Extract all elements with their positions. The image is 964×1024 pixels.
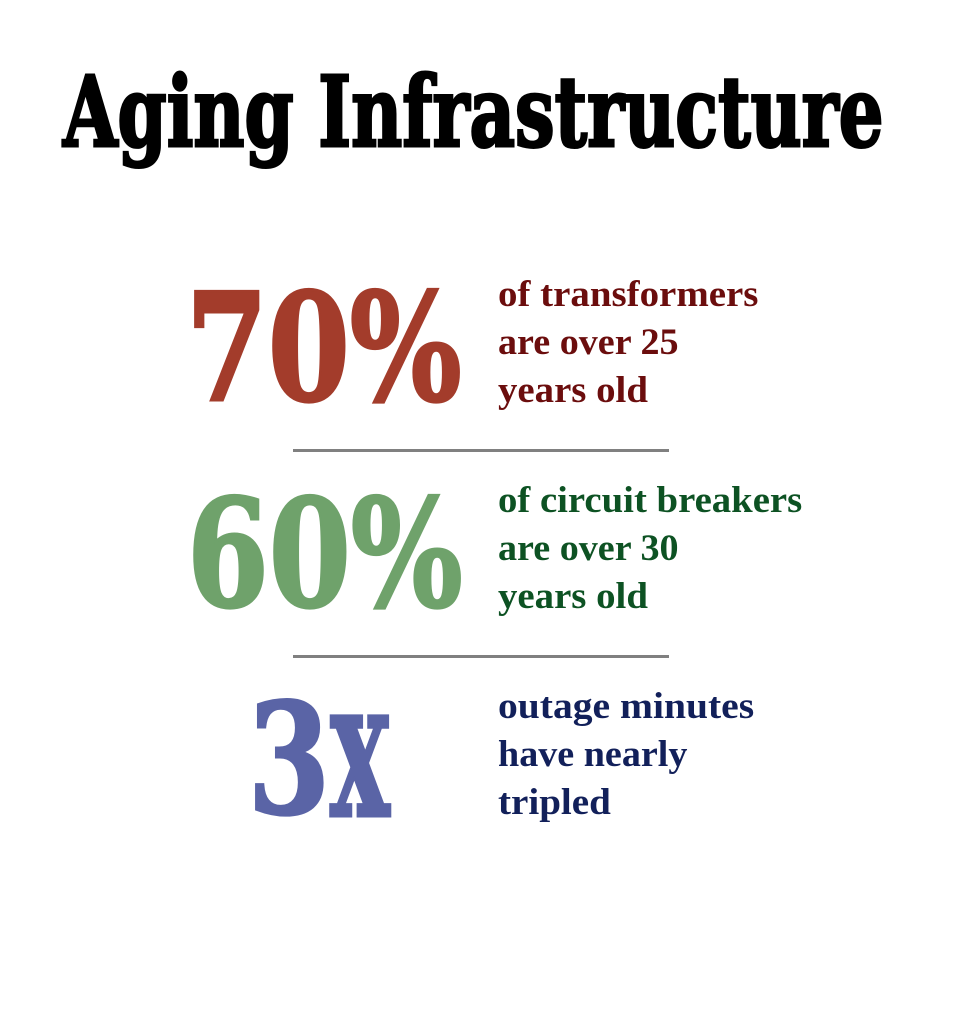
description: transformers: years old (498, 370, 648, 411)
description: outage minutes: tripled (498, 782, 611, 823)
description: circuit breakers: are over 30 (498, 528, 679, 569)
title: Aging Infrastructure (62, 54, 883, 169)
big number: 70%: 70% (186, 260, 462, 436)
big number: 60%: 60% (187, 466, 463, 642)
big number: 3x: 3 (248, 671, 330, 850)
description: transformers (498, 274, 758, 411)
description: circuit breakers: years old (498, 576, 648, 617)
panel: transformers stat (186, 260, 758, 436)
description: circuit breakers: of circuit breakers (498, 480, 802, 521)
divider line (293, 655, 669, 658)
description: transformers: are over 25 (498, 322, 679, 363)
big number: 3x (248, 637, 391, 862)
panel: circuit breakers stat (187, 466, 802, 642)
big number: 3x: x (330, 637, 391, 862)
description: transformers: of transformers (498, 274, 758, 315)
description: outage minutes: have nearly (498, 734, 688, 775)
description: outage minutes: outage minutes (498, 686, 754, 727)
description: outage minutes (498, 686, 754, 823)
description: circuit breakers (498, 480, 802, 617)
divider line (293, 449, 669, 452)
panel: outage stat (248, 637, 754, 862)
